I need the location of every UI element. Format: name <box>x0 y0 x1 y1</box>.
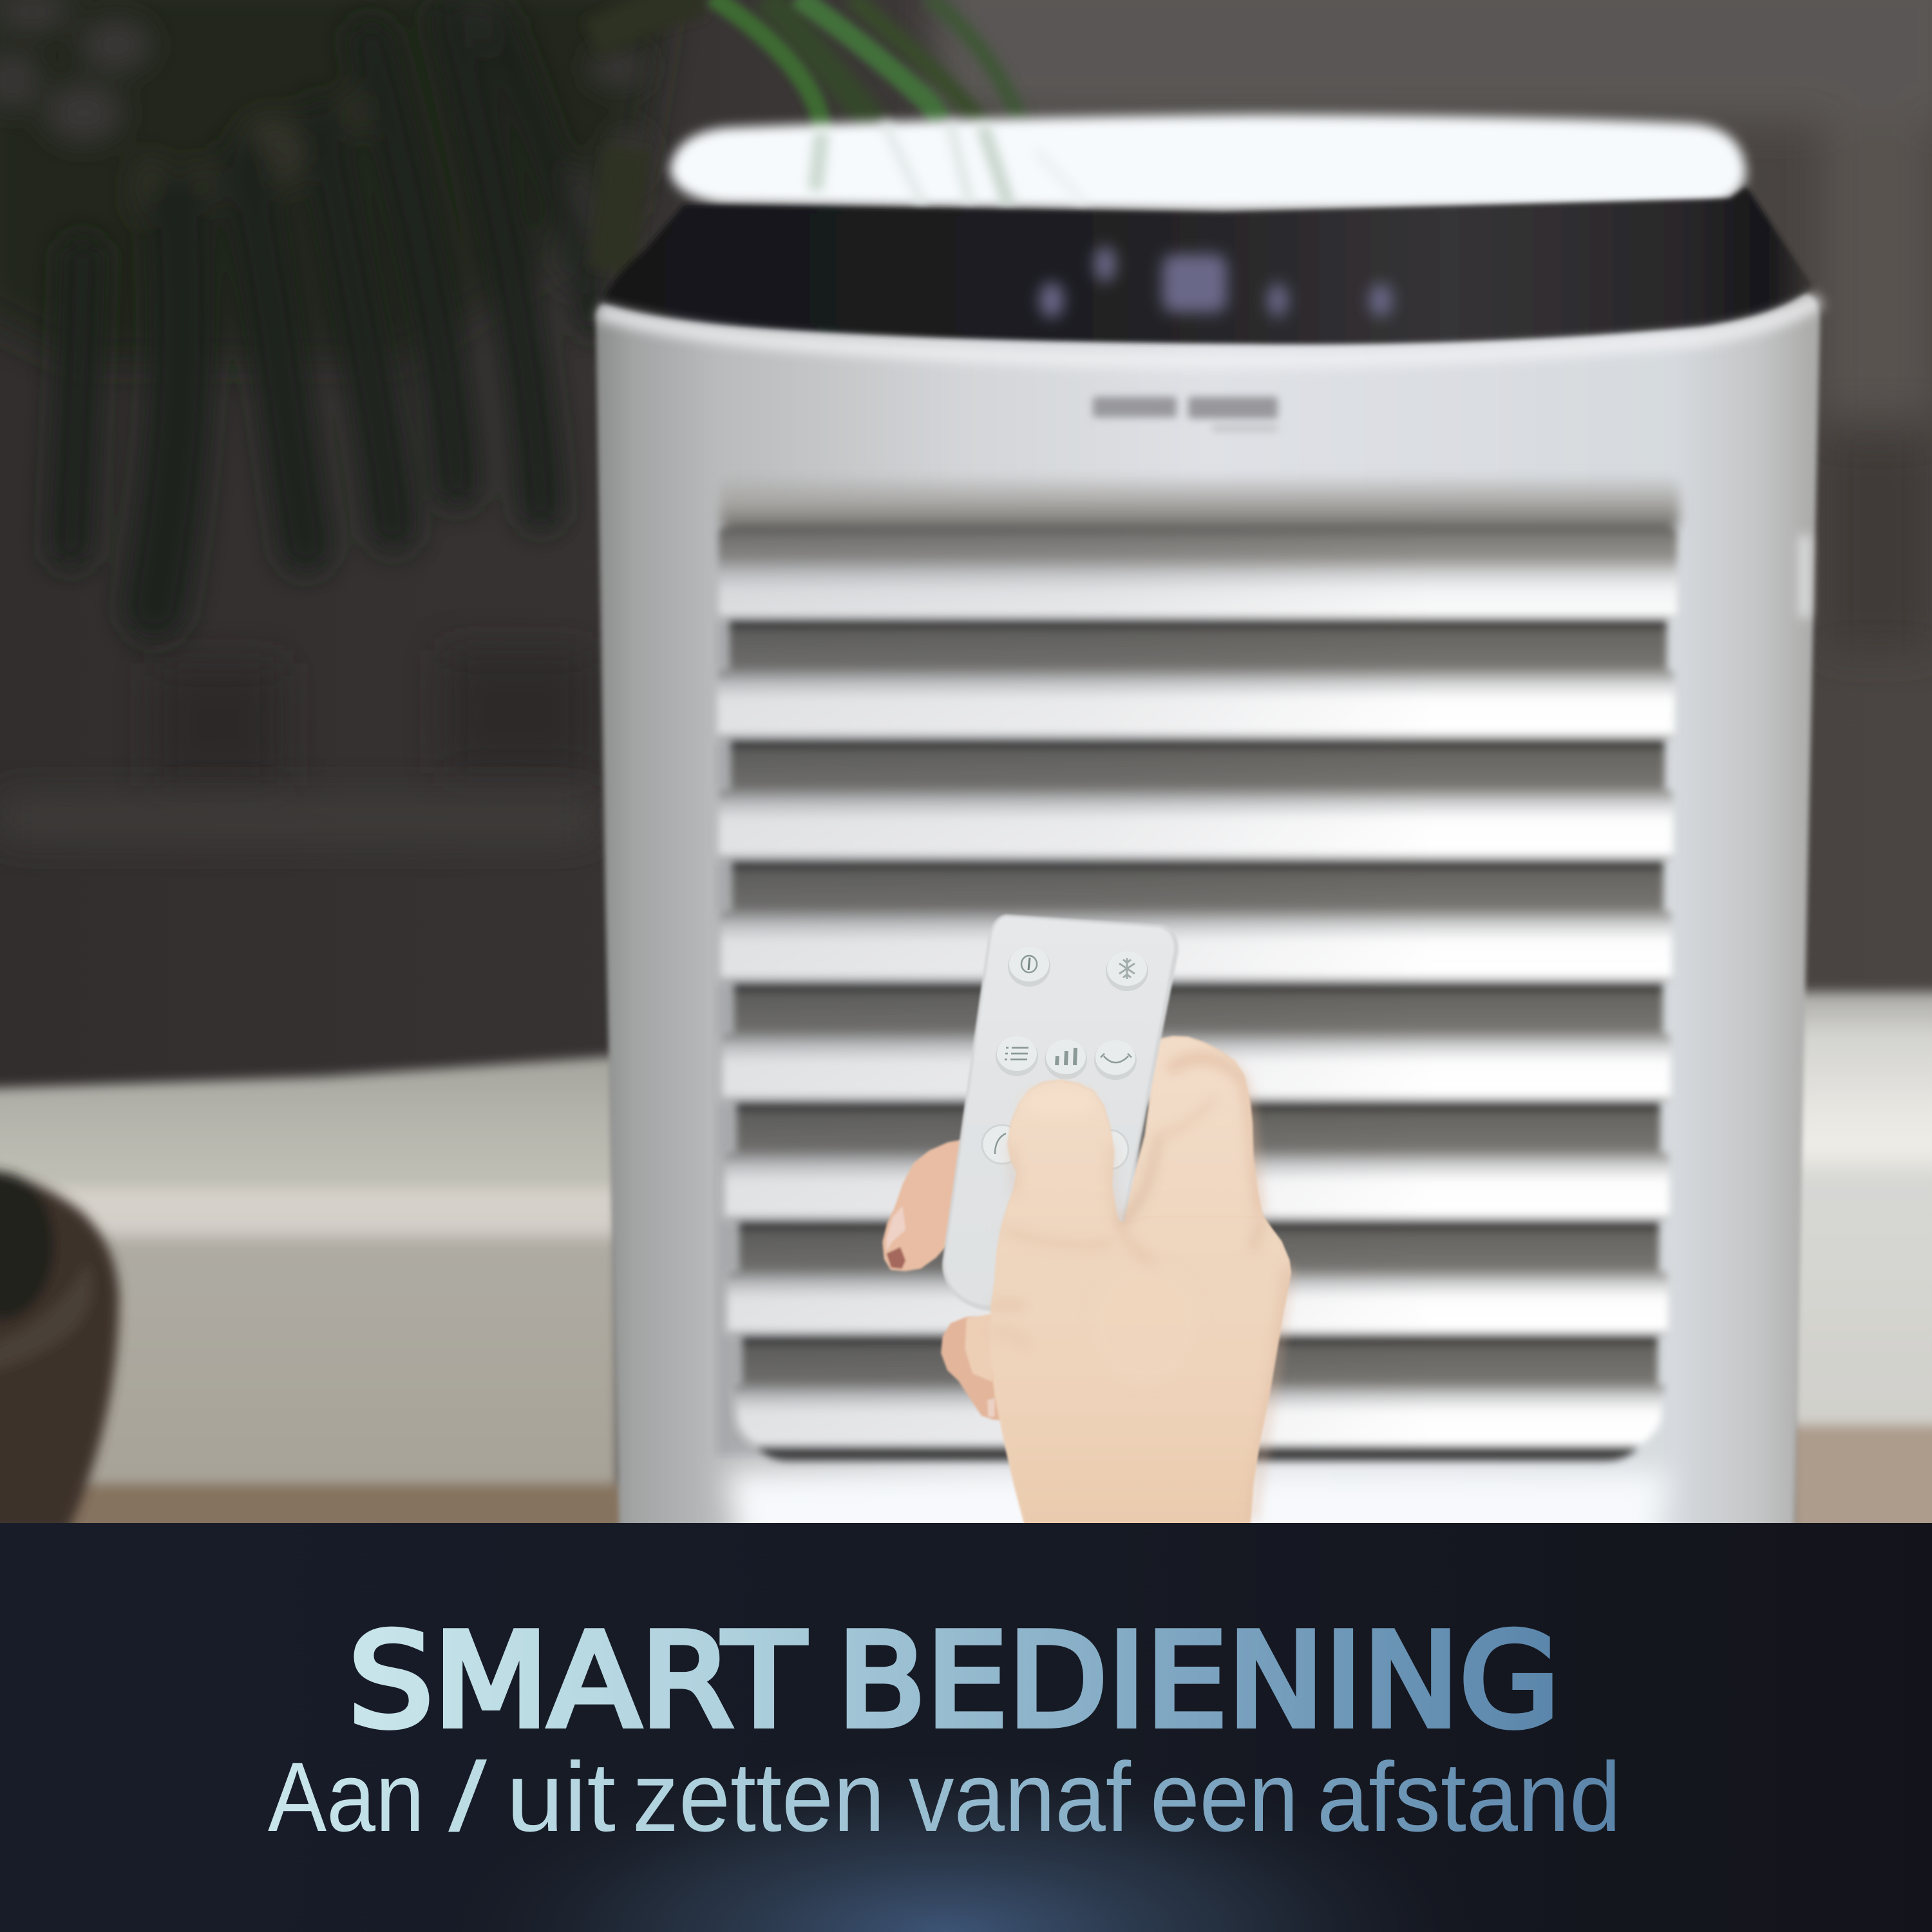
subtitle <box>268 1742 1621 1852</box>
air cooler unit <box>596 115 1820 1558</box>
thumb and palm <box>990 1081 1290 1526</box>
remote buttons <box>982 947 1148 1169</box>
background: wall and floor <box>0 0 1932 1546</box>
subtitle: / <box>448 1742 488 1852</box>
button: swing <box>1094 1040 1137 1080</box>
subtitle: zetten <box>632 1742 885 1852</box>
unit body <box>596 293 1820 1546</box>
subtitle: vanaf <box>909 1742 1131 1852</box>
top lid <box>670 115 1746 211</box>
title: SMART <box>348 1606 806 1756</box>
grille <box>717 473 1680 1558</box>
hand shading <box>993 1058 1289 1522</box>
dark control band <box>599 187 1820 361</box>
subtitle: een <box>1150 1742 1298 1852</box>
panel: bottom caption banner <box>0 1523 1932 1932</box>
button: snowflake <box>1106 951 1148 991</box>
subtitle: uit <box>506 1742 616 1852</box>
side button <box>1800 535 1809 618</box>
button: power <box>1008 947 1050 987</box>
title <box>348 1606 1560 1756</box>
subtitle: Aan <box>268 1742 424 1852</box>
title: BEDIENING <box>837 1606 1560 1756</box>
hand holding remote <box>884 914 1290 1526</box>
remote control <box>942 914 1179 1311</box>
back of hand and fingers <box>884 1037 1290 1419</box>
brand logo (out of focus) <box>1093 397 1278 431</box>
button: cloud <box>982 1125 1022 1164</box>
plant pot <box>0 1169 119 1533</box>
plant leaves (blurred) <box>0 0 1021 609</box>
button: partly hidden <box>1094 1130 1128 1169</box>
button: menu list <box>996 1036 1038 1076</box>
button: fan speed bars <box>1045 1039 1087 1079</box>
display LEDs <box>1039 246 1392 318</box>
subtitle: afstand <box>1317 1742 1621 1852</box>
